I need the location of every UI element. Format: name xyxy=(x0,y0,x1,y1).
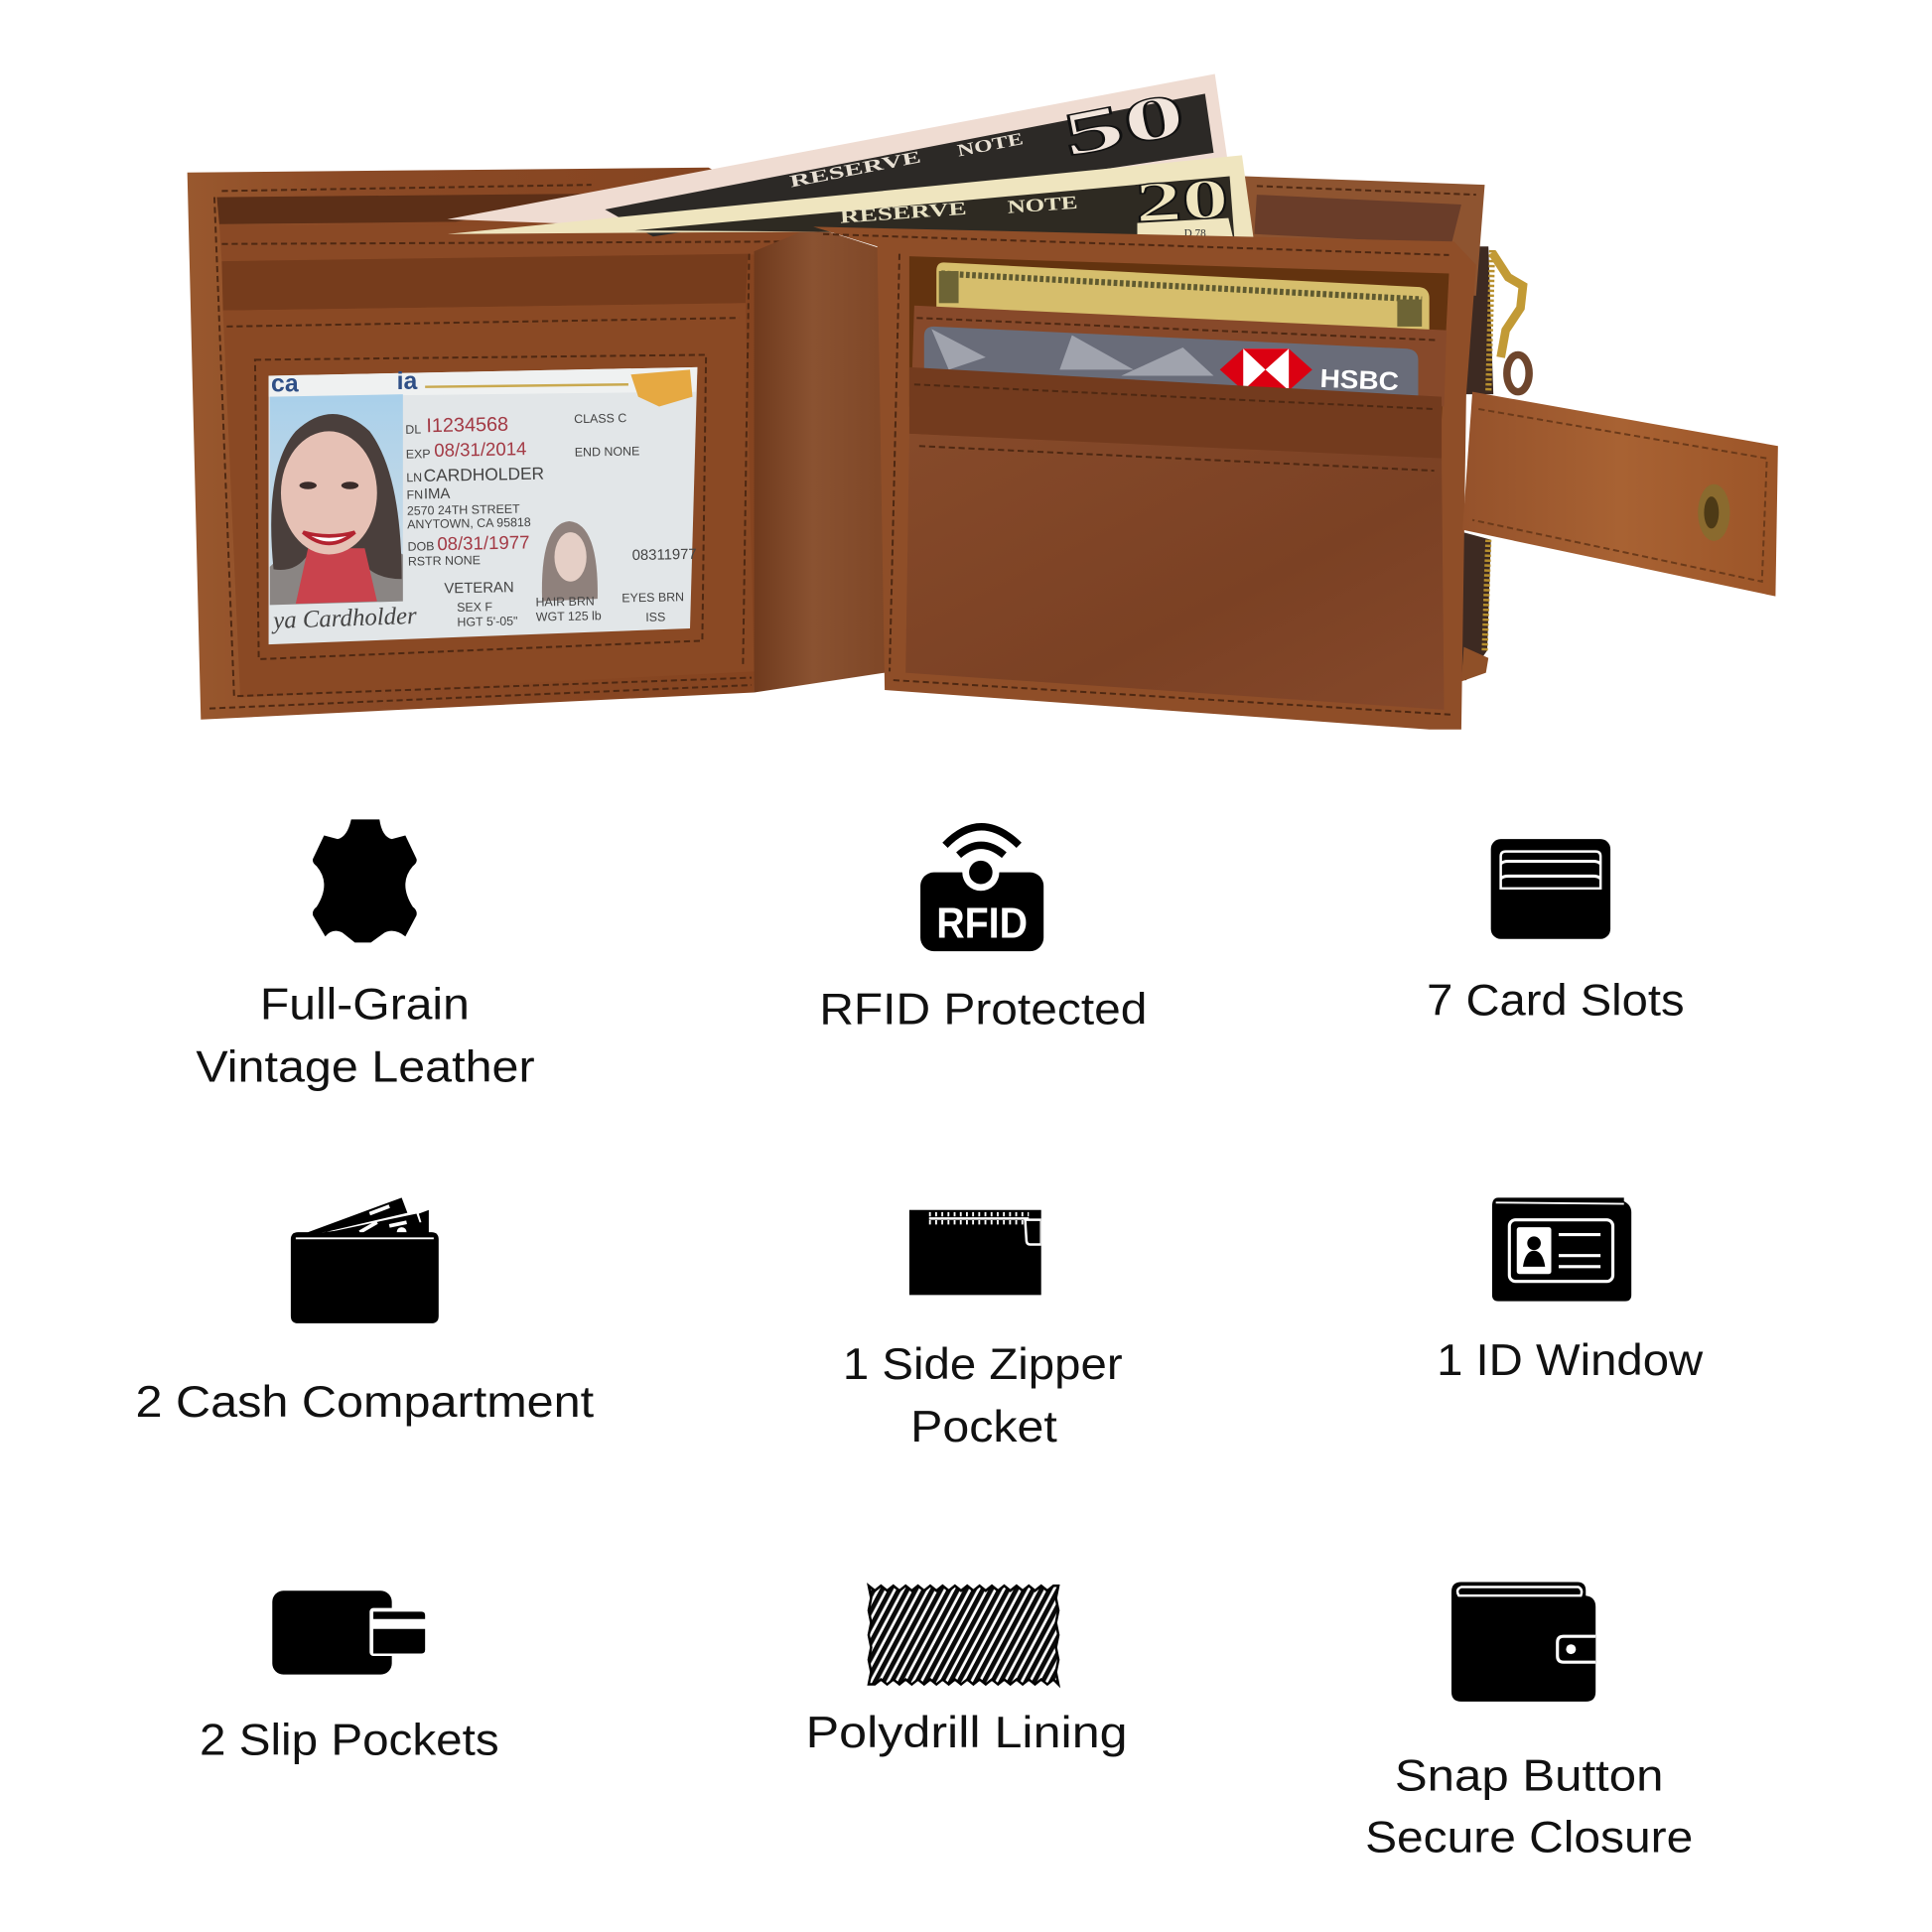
label: Polydrill Lining xyxy=(806,1709,1128,1757)
icon: wallet with cash xyxy=(291,1197,439,1323)
label xyxy=(843,1340,1123,1451)
ID text: EYES BRN xyxy=(621,590,684,605)
ID text: CLASS C xyxy=(574,411,626,426)
left panel xyxy=(188,168,818,720)
feature: full-grain leather xyxy=(196,819,535,1092)
front right panel xyxy=(813,226,1476,730)
feature: ID window xyxy=(1437,1197,1704,1385)
ID text: LN xyxy=(406,471,422,484)
ID text: RSTR NONE xyxy=(408,553,481,569)
feature: zipper pocket xyxy=(843,1210,1123,1451)
ID text: IMA xyxy=(424,486,451,502)
label: Secure Closure xyxy=(1365,1813,1693,1862)
ID text: DOB xyxy=(407,539,435,554)
label: Snap Button xyxy=(1395,1751,1663,1800)
ID window: ia xyxy=(397,368,418,395)
strap with snap button xyxy=(1462,392,1778,597)
ID text: DL xyxy=(405,423,421,437)
ID window: ya Cardholder xyxy=(270,603,417,634)
label: Vintage Leather xyxy=(196,1043,535,1092)
ID text: 08/31/1977 xyxy=(437,531,530,554)
back right panel xyxy=(1244,176,1484,296)
label: 7 Card Slots xyxy=(1427,977,1685,1026)
bill: twenty: RESERVE xyxy=(839,199,967,228)
center fold xyxy=(755,226,885,692)
label xyxy=(196,980,535,1092)
ID text xyxy=(405,410,698,630)
feature: polydrill lining xyxy=(806,1586,1128,1757)
icon: card slots xyxy=(1491,839,1610,939)
bill: twenty: 20 xyxy=(1134,168,1230,234)
ID text: ANYTOWN, CA 95818 xyxy=(407,515,531,531)
ID text: CARDHOLDER xyxy=(423,464,544,485)
cash bills xyxy=(448,73,1254,244)
label xyxy=(1365,1751,1693,1862)
icon: RFID tag: RFID xyxy=(936,899,1028,947)
ID text: 08/31/2014 xyxy=(434,438,527,461)
ID secondary photo xyxy=(542,521,598,602)
label: Pocket xyxy=(910,1403,1057,1451)
ID text: 08311977 xyxy=(632,547,697,564)
bill: fifty xyxy=(448,73,1228,236)
label: RFID Protected xyxy=(819,985,1147,1034)
bill: fifty: 50 xyxy=(1056,80,1190,170)
ID text: EXP xyxy=(406,447,431,462)
ID window xyxy=(269,367,698,644)
feature: snap button closure xyxy=(1365,1583,1693,1862)
label: 2 Slip Pockets xyxy=(200,1716,499,1764)
label: 1 ID Window xyxy=(1437,1336,1704,1385)
snap button xyxy=(1698,484,1729,541)
card pocket one xyxy=(911,306,1447,407)
icon: zipper pouch xyxy=(909,1210,1041,1295)
ID text: SEX F xyxy=(457,600,493,615)
ID text: HGT 5'-05" xyxy=(457,615,518,629)
icon: leather hide xyxy=(313,819,417,942)
ID photo xyxy=(270,394,403,605)
bill: fifty: RESERVE xyxy=(788,147,922,192)
label: 1 Side Zipper xyxy=(843,1340,1123,1389)
ID text: 2570 24TH STREET xyxy=(407,502,520,518)
zipper pocket xyxy=(1453,246,1529,681)
bill: fifty: NOTE xyxy=(956,129,1025,161)
icon: snap wallet xyxy=(1451,1583,1595,1702)
ID text: VETERAN xyxy=(444,580,514,597)
card pocket two xyxy=(909,367,1442,461)
bill: twenty: NOTE xyxy=(1007,193,1078,218)
label: Full-Grain xyxy=(260,980,470,1029)
ID text: HAIR BRN xyxy=(535,594,595,610)
main pocket xyxy=(894,434,1451,715)
feature: cash compartment xyxy=(136,1197,595,1427)
ID text: I1234568 xyxy=(426,414,508,437)
feature: RFID protected xyxy=(819,827,1147,1034)
HSBC card: HSBC xyxy=(1319,363,1400,396)
feature: card slots xyxy=(1427,839,1685,1026)
icon: fabric swatch xyxy=(869,1586,1058,1685)
feature: slip pockets xyxy=(200,1590,499,1764)
wallet photo xyxy=(188,73,1778,730)
icon: RFID tag xyxy=(920,827,1043,951)
bill: twenty: D 78 xyxy=(1184,227,1206,239)
gold card xyxy=(936,262,1430,336)
ID text: ISS xyxy=(645,610,665,624)
ID window: ca xyxy=(271,371,299,398)
icon: slip pocket wallet xyxy=(272,1590,426,1675)
HSBC card xyxy=(924,327,1418,397)
ID text: FN xyxy=(406,487,423,502)
label: 2 Cash Compartment xyxy=(136,1378,595,1427)
icon: ID wallet xyxy=(1492,1197,1631,1302)
ID text: WGT 125 lb xyxy=(536,609,602,624)
bill: twenty xyxy=(448,155,1254,244)
HSBC logo xyxy=(1220,348,1312,390)
ID text: END NONE xyxy=(575,444,639,460)
